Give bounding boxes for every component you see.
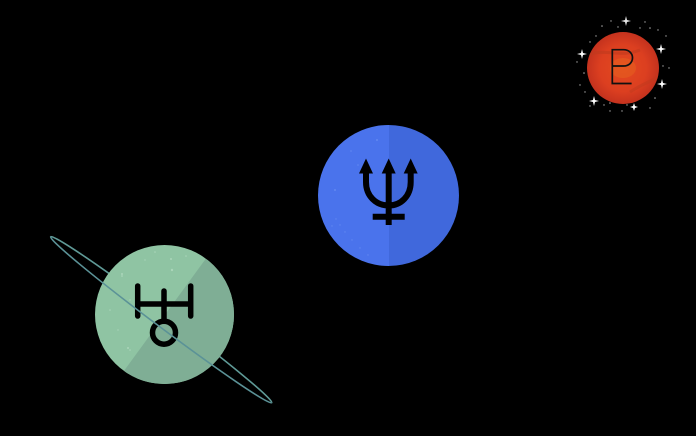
neptune symbol [359,158,418,225]
infographic: outer planets [50,16,670,404]
planet: Neptune [318,125,460,266]
uranus disc [95,245,234,384]
uranus symbol [138,286,191,344]
ring: front arc [51,237,272,403]
planet: Uranus [51,237,272,403]
pluto disc [587,32,659,104]
ring: back arc [51,237,272,403]
neptune disc [318,125,460,266]
starfield [576,16,670,112]
planet: Pluto [576,16,670,112]
pluto symbol [612,50,632,84]
